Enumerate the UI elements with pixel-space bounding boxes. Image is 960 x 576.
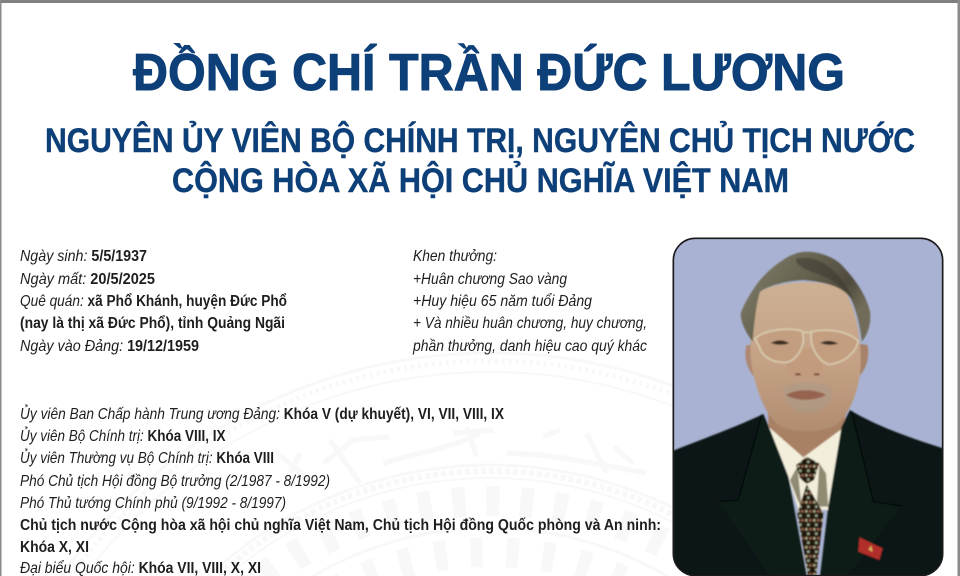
text block: positions held: Chủ tịch nước Cộng hòa xã hội chủ nghĩa Việt Nam, Chủ tịch Hội đồng Quốc phòng và An ninh: [20,517,661,534]
text block: awards: + Và nhiều huân chương, huy chương, [413,315,647,332]
text block: positions held: Ủy viên Ban Chấp hành Trung ương Đảng: Khóa V (dự khuyết), VI, VII, VIII, IX [20,404,505,423]
face [751,282,861,431]
text block: awards: Khen thưởng: [413,248,497,265]
portrait photo [673,238,943,576]
nostrils [795,373,819,375]
shirt [768,425,842,510]
text block: positions held: Phó Thủ tướng Chính phủ (9/1992 - 8/1997) [20,495,286,512]
ears [745,345,757,377]
watermark: bronze drum pattern [0,353,960,576]
text block: positions held: Ủy viên Thường vụ Bộ Chính trị: Khóa VIII [20,448,274,467]
text block: personal details [20,248,287,355]
text block: awards [412,248,647,355]
text block: positions held: Khóa X, XI [20,539,89,556]
title: ĐỒNG CHÍ TRẦN ĐỨC LƯƠNG [133,43,845,102]
subtitle [45,121,915,200]
text block: positions held [20,404,661,576]
necktie [796,457,823,576]
text block: awards: phần thưởng, danh hiệu cao quý khác [412,338,647,355]
glasses frame [755,329,858,364]
text block: personal details: Ngày sinh: 5/5/1937 [20,248,147,265]
text block: personal details: Ngày mất: 20/5/2025 [20,271,155,288]
subtitle: CỘNG HÒA XÃ HỘI CHỦ NGHĨA VIỆT NAM [172,161,789,200]
text block: awards: +Huy hiệu 65 năm tuổi Đảng [413,292,592,310]
photo border [673,238,943,576]
text block: positions held: Phó Chủ tịch Hội đồng Bộ trưởng (2/1987 - 8/1992) [20,473,330,490]
shirt shadow [790,463,828,507]
eyes [771,340,838,345]
text block: awards: +Huân chương Sao vàng [413,271,567,288]
text block: positions held: Ủy viên Bộ Chính trị: Khóa VIII, IX [20,426,226,445]
hair [741,252,870,342]
suit jacket [673,410,943,576]
text block: personal details: Quê quán: xã Phổ Khánh, huyện Đức Phổ [20,292,287,310]
mouth [786,390,826,400]
text block: personal details: Ngày vào Đảng: 19/12/1959 [20,338,199,355]
text block: personal details: (nay là thị xã Đức Phổ), tỉnh Quảng Ngãi [20,314,285,332]
neck [766,412,846,458]
flag pin [858,537,883,560]
glasses lenses [759,330,856,352]
face shading [783,382,832,413]
